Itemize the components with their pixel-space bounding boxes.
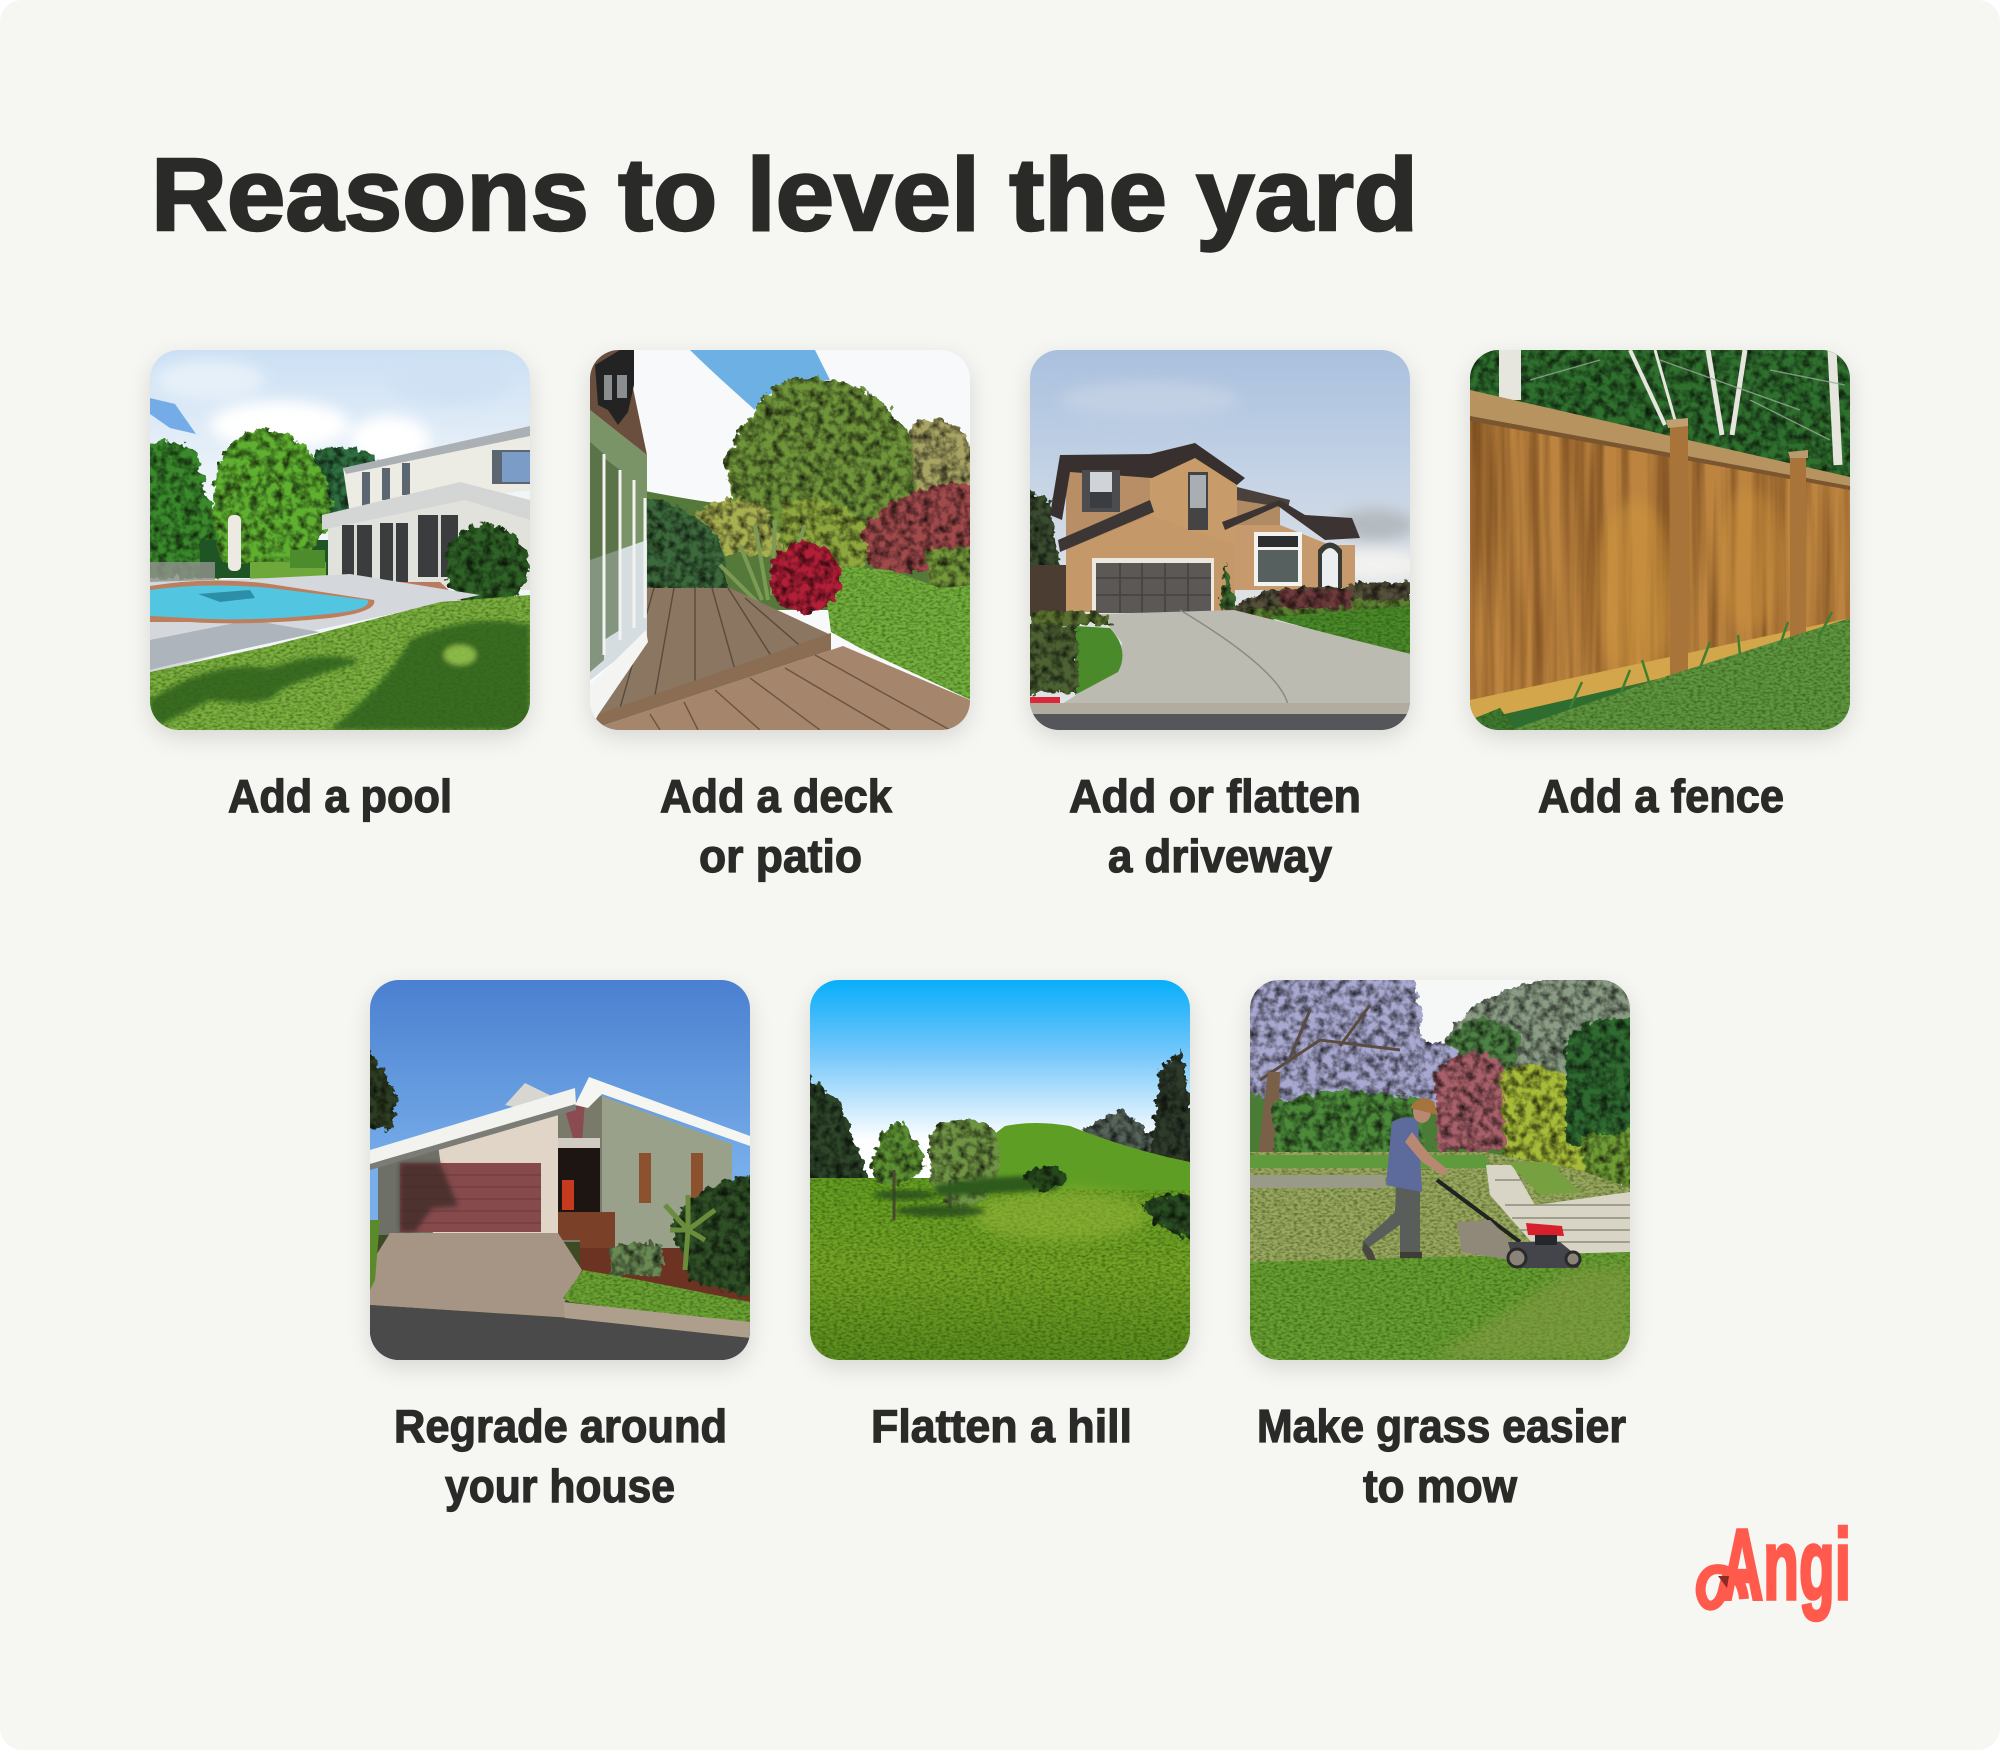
slats [639, 1153, 651, 1203]
hill [930, 1123, 1190, 1280]
windows [1082, 470, 1120, 512]
pool [150, 580, 374, 623]
photo: wooden fence [1460, 340, 1860, 730]
driveway [1060, 610, 1410, 705]
label: add a fence: Add a fence [1538, 770, 1784, 822]
panel: add or flatten a driveway [1024, 350, 1425, 882]
back roofs [505, 1083, 570, 1115]
posts [1670, 422, 1688, 680]
grass [1510, 618, 1850, 730]
label line: a driveway: a driveway [1108, 830, 1332, 882]
lawn [150, 595, 530, 730]
logo: Angi: Angi [1721, 1509, 1851, 1621]
entry [558, 1145, 600, 1215]
man [1362, 1185, 1420, 1255]
front grass [1250, 1252, 1630, 1360]
lantern [595, 350, 634, 425]
label line: to mow: to mow [1363, 1460, 1517, 1512]
plants [580, 1248, 755, 1305]
label line: your house: your house [445, 1460, 675, 1512]
ground [1250, 1152, 1630, 1265]
title: Reasons to level the yard [151, 137, 1418, 252]
label: make grass easier to mow: Make grass easier [1257, 1400, 1626, 1452]
panel: add a pool [144, 350, 530, 822]
photo: grassy hill [804, 980, 1200, 1360]
mower [1437, 1180, 1520, 1242]
upper deck [596, 588, 831, 715]
roofs [370, 1088, 576, 1164]
panel: add a deck or patio [590, 350, 985, 882]
patio [150, 574, 480, 672]
lower deck [590, 646, 970, 730]
label: regrade around your house: Regrade around [394, 1400, 727, 1452]
lawn [810, 1178, 1190, 1360]
trees [872, 1119, 999, 1210]
photo: house with pool [144, 350, 530, 730]
top rail [1470, 390, 1850, 488]
label: add or flatten a driveway: Add or flatten [1069, 770, 1361, 822]
lawn [563, 1270, 750, 1326]
logo: Angi [1701, 1509, 1851, 1621]
label line: or patio: or patio [699, 830, 862, 882]
garage [1092, 558, 1214, 614]
photo: modern house on a slope [364, 980, 758, 1360]
road [370, 1305, 750, 1360]
glass wall [590, 410, 647, 680]
label: add a deck or patio: Add a deck [660, 770, 892, 822]
roofs [1050, 443, 1245, 520]
label: add a pool: Add a pool [228, 770, 452, 822]
walls [378, 1108, 560, 1235]
shrubs [1220, 582, 1410, 618]
panel: add a fence [1460, 340, 1860, 822]
house walls [1066, 470, 1150, 550]
upper storey [343, 436, 530, 508]
lower storey [328, 490, 530, 590]
bottom rail [1470, 618, 1850, 722]
photo: wooden deck and garden [590, 350, 985, 730]
panel: make grass easier to mow [1242, 972, 1640, 1512]
panel: flatten a hill [804, 980, 1200, 1452]
label: flatten a hill: Flatten a hill [871, 1400, 1132, 1452]
ground base [370, 1212, 750, 1360]
boards [1470, 412, 1850, 712]
photo: man mowing a lawn [1242, 972, 1640, 1360]
photo: two storey house with driveway [1024, 350, 1425, 730]
garage door [400, 1163, 541, 1232]
driveway [370, 1233, 582, 1318]
panel: regrade around your house [364, 980, 758, 1512]
